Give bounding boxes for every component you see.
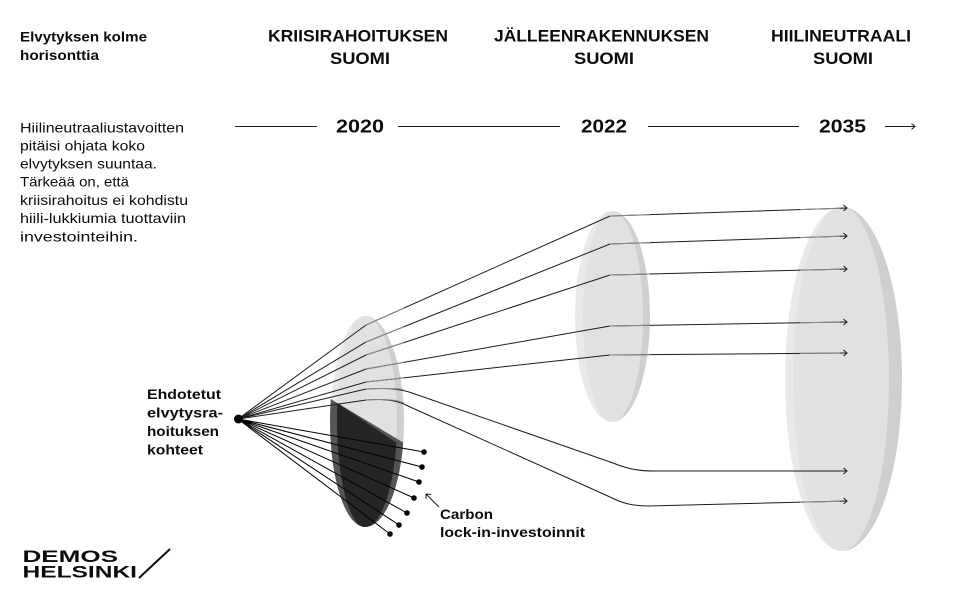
logo: Demos Helsinki xyxy=(22,548,170,582)
intro text: Tärkeää on, että xyxy=(20,174,129,190)
carbon lock-in section of disc xyxy=(330,399,404,527)
disc: 2035 xyxy=(785,207,902,551)
year 2022: 2022 xyxy=(581,116,627,136)
label: carbon lock-in investments: Carbon xyxy=(440,506,493,522)
flow lines to 2035 xyxy=(238,205,847,506)
heading: Kriisirahoituksen Suomi xyxy=(268,26,448,68)
heading: Jälleenrakennuksen Suomi: SUOMI xyxy=(574,49,634,68)
title: Elvytyksen kolme xyxy=(20,28,147,44)
heading: Jälleenrakennuksen Suomi xyxy=(494,26,709,68)
disc: 2022 xyxy=(575,211,650,422)
label: carbon lock-in investments xyxy=(440,506,585,540)
intro text: Hiilineutraaliustavoitten xyxy=(20,120,184,136)
logo: Demos Helsinki: DEMOS xyxy=(22,548,118,566)
timeline xyxy=(235,116,915,136)
title xyxy=(20,28,147,63)
year 2035: 2035 xyxy=(819,116,866,136)
intro text: investointeihin. xyxy=(20,228,138,244)
label: proposed recovery funding targets: Ehdotetut xyxy=(147,386,221,402)
label: proposed recovery funding targets: hoituksen xyxy=(147,423,219,439)
heading: Kriisirahoituksen Suomi: SUOMI xyxy=(330,49,390,68)
heading: Hiilineutraali Suomi xyxy=(771,26,911,68)
title: horisonttia xyxy=(20,47,99,63)
heading: Jälleenrakennuksen Suomi: JÄLLEENRAKENNUKSEN xyxy=(494,26,709,46)
heading: Hiilineutraali Suomi: SUOMI xyxy=(813,49,873,68)
arrowheads xyxy=(844,205,847,504)
intro text: kriisirahoitus ei kohdistu xyxy=(20,192,188,208)
heading: Hiilineutraali Suomi: HIILINEUTRAALI xyxy=(771,26,911,46)
intro text xyxy=(20,120,188,244)
intro text: pitäisi ohjata koko xyxy=(20,138,145,154)
label: carbon lock-in investments: lock-in-investoinnit xyxy=(440,524,585,540)
label: proposed recovery funding targets: elvytysra- xyxy=(147,404,223,420)
label: proposed recovery funding targets xyxy=(147,386,223,458)
carbon lock-in lines and dots xyxy=(238,419,427,537)
intro text: elvytyksen suuntaa. xyxy=(20,156,157,172)
disc: 2020 xyxy=(331,316,404,527)
year 2020: 2020 xyxy=(336,116,384,136)
heading: Kriisirahoituksen Suomi: KRIISIRAHOITUKSEN xyxy=(268,26,448,46)
intro text: hiili-lukkiumia tuottaviin xyxy=(20,210,186,226)
arrow: to carbon lock-in xyxy=(426,494,439,507)
label: proposed recovery funding targets: kohteet xyxy=(147,442,203,458)
logo: Demos Helsinki: HELSINKI xyxy=(22,564,137,582)
origin dot xyxy=(234,414,243,424)
